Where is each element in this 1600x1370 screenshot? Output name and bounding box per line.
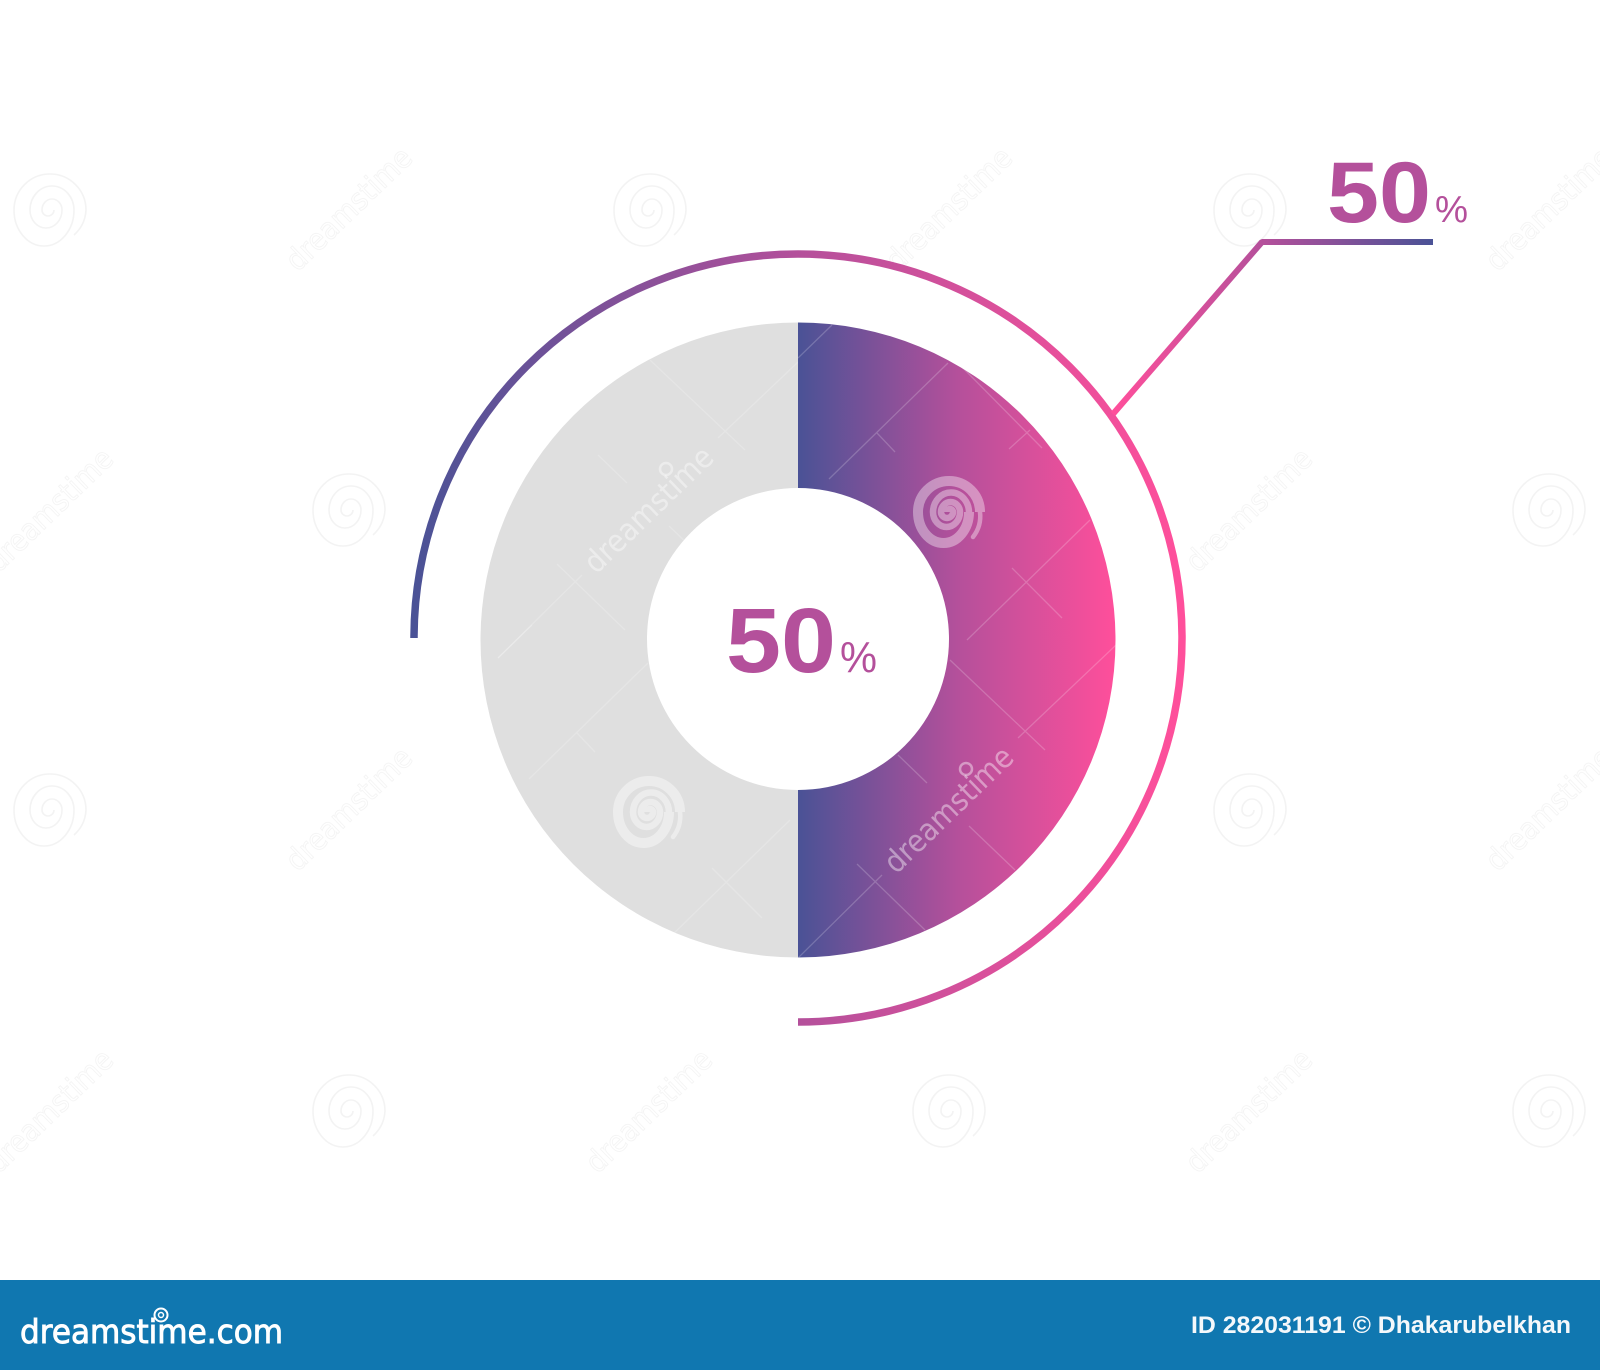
label: center 50%: % xyxy=(840,633,877,682)
watermark: faint spirals on white xyxy=(14,174,1585,1147)
watermark: faint wordmarks on white: dreamstime xyxy=(579,1043,720,1180)
watermark: faint wordmarks on white: dreamstime xyxy=(879,141,1020,278)
leader line to top-right label xyxy=(1113,242,1433,414)
donut segment: grey remainder 50% xyxy=(480,322,798,958)
footer bar xyxy=(0,1280,1600,1370)
label: top-right 50%: % xyxy=(1435,189,1468,231)
watermark: faint wordmarks on white: dreamstime xyxy=(1179,1043,1320,1180)
watermark: faint wordmarks on white xyxy=(0,141,1600,1180)
watermark: faint wordmarks on white: dreamstime xyxy=(279,741,420,878)
watermark on grey segment xyxy=(498,451,714,848)
label: top-right 50% xyxy=(1327,145,1468,241)
donut segment: gradient 50% xyxy=(798,322,1116,958)
donut chart xyxy=(480,322,1116,958)
footer credit: ID 282031191 © Dhakarubelkhan xyxy=(1191,1312,1571,1339)
footer logo: dreamstime.com: dreamstime.com xyxy=(20,1312,283,1351)
label: top-right 50%: 50 xyxy=(1327,145,1431,241)
watermark: faint wordmarks on white: dreamstime xyxy=(279,141,420,278)
watermark on grey segment: dreamstime xyxy=(577,439,721,581)
outer progress arc xyxy=(414,254,1182,1022)
watermark on gradient segment xyxy=(798,325,1116,958)
label: center 50% xyxy=(726,590,877,692)
label: center 50%: 50 xyxy=(726,590,836,692)
watermark: faint wordmarks on white: dreamstime xyxy=(1179,442,1320,579)
watermark on gradient segment: dreamstime xyxy=(877,739,1021,881)
